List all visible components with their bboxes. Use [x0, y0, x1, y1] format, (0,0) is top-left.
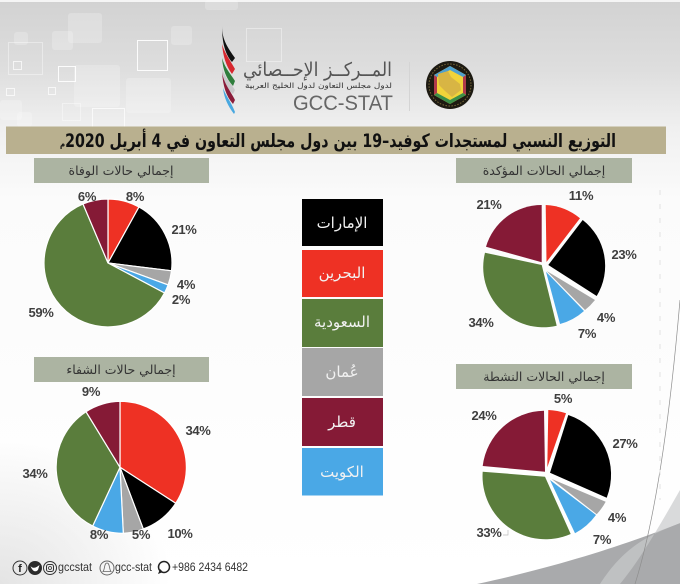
pie chart: deaths: 2% [172, 292, 191, 307]
logo arabic name: المــركــز الإحــصائي [243, 59, 392, 81]
pie chart: deaths: 4% [177, 277, 196, 292]
legend: Bahrain: البحرين [319, 264, 365, 282]
footer contacts [13, 560, 248, 575]
pie chart: deaths: 21% [171, 222, 197, 237]
heading: deaths [34, 158, 209, 183]
icon: GCC emblem [426, 61, 474, 109]
icon: whatsapp [158, 562, 170, 574]
pie chart: deaths: 8% [126, 189, 145, 204]
pie chart: confirmed: 4% [597, 310, 616, 325]
pie chart: deaths: 59% [28, 305, 54, 320]
legend: Kuwait: الكويت [320, 463, 364, 481]
logo arabic subtitle: لدول مجلس التعاون لدول الخليج العربية [245, 81, 392, 90]
legend: Saudi Arabia [302, 299, 383, 347]
logo divider [409, 62, 410, 111]
icon: facebook: f [18, 563, 22, 575]
pie chart: confirmed: 34% [468, 315, 494, 330]
icon: facebook [13, 561, 27, 575]
title bar [6, 126, 666, 154]
legend: Bahrain [302, 250, 383, 297]
pie chart: active: 27% [612, 436, 638, 451]
legend [302, 199, 383, 496]
legend: Oman: عُمان [325, 363, 359, 381]
logo GCC-STAT: GCC-STAT [293, 92, 393, 115]
legend: Qatar [302, 398, 383, 446]
heading: recovered: إجمالي حالات الشفاء [66, 362, 176, 377]
pie chart: recovered: 34% [185, 423, 211, 438]
pie chart: confirmed [468, 188, 637, 341]
title bar: التوزيع النسبي لمستجدات كوفيد–19 بين دول مجلس التعاون في 4 أبريل 2020م [60, 129, 616, 152]
pie chart: recovered: 5% [132, 527, 151, 542]
pie chart: recovered [22, 384, 211, 542]
phone number: +986 2434 6482 [172, 560, 248, 574]
pie chart: active: 5% [554, 391, 573, 406]
pie chart: recovered: 8% [90, 527, 109, 542]
heading: deaths: إجمالي حالات الوفاة [69, 163, 173, 179]
pie chart: confirmed: 7% [578, 326, 597, 341]
pie chart: active: 7% [593, 532, 612, 547]
pie chart: confirmed: 21% [476, 197, 502, 212]
pie chart: recovered: 34% [22, 466, 48, 481]
pie chart: deaths [28, 189, 197, 327]
pie chart: deaths: 6% [78, 189, 97, 204]
logo ribbon [222, 26, 235, 114]
pie chart: active: 4% [608, 510, 627, 525]
heading: confirmed [456, 158, 632, 183]
heading: recovered [34, 357, 209, 382]
legend: Kuwait [302, 448, 383, 496]
pie chart: confirmed: 11% [569, 188, 594, 203]
legend: UAE [302, 199, 383, 246]
pie chart: confirmed: 23% [611, 247, 637, 262]
heading: active [456, 364, 632, 389]
icon: twitter [28, 561, 42, 575]
handle: gccstat: gccstat [58, 560, 93, 574]
pie chart: active: 33% [476, 525, 502, 540]
pie chart: active [471, 391, 638, 547]
pie chart: recovered: 10% [167, 526, 193, 541]
legend: Oman [302, 348, 383, 396]
pie chart: recovered: 9% [82, 384, 101, 399]
heading: confirmed: إجمالي الحالات المؤكدة [483, 163, 605, 179]
pie chart: active: 24% [471, 408, 497, 423]
legend: Qatar: قطر [327, 413, 356, 431]
handle: gcc-stat: gcc-stat [115, 560, 153, 574]
heading: active: إجمالي الحالات النشطة [483, 369, 605, 384]
legend: Saudi Arabia: السعودية [314, 313, 370, 331]
legend: UAE: الإمارات [317, 214, 367, 232]
icon: snapchat [100, 561, 114, 575]
icon: instagram [44, 562, 56, 574]
